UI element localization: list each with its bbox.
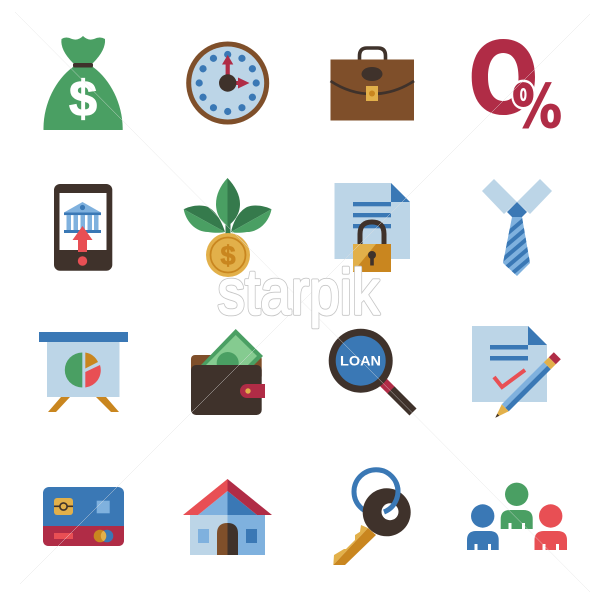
icon: credit card bbox=[43, 487, 124, 546]
icon: zero percent: % bbox=[512, 72, 562, 142]
icon: money bag: $ bbox=[69, 71, 97, 127]
icon: loan magnifier: LOAN bbox=[340, 354, 381, 368]
icon: money bag bbox=[43, 36, 123, 130]
icon: key bbox=[333, 470, 411, 565]
icon: locked document bbox=[334, 183, 410, 272]
icon: mobile banking bbox=[54, 184, 112, 271]
icon: house bbox=[183, 479, 272, 555]
icon: clock bbox=[186, 42, 269, 124]
icon: plant with coin: $ bbox=[220, 240, 236, 270]
icon: wallet with cash bbox=[191, 329, 265, 415]
icon: necktie bbox=[482, 179, 552, 276]
icon: briefcase bbox=[330, 48, 414, 120]
icon: plant with coin bbox=[184, 178, 272, 277]
watermark: starpik: starpik bbox=[218, 256, 380, 328]
icon: document with pencil bbox=[472, 326, 561, 418]
icon: zero percent bbox=[472, 39, 562, 142]
icon: zero percent: % bbox=[512, 72, 562, 142]
icon: team of people bbox=[467, 483, 567, 550]
watermark: starpik: starpik bbox=[218, 256, 380, 328]
icon: loan magnifier bbox=[329, 329, 413, 412]
icon: presentation board bbox=[39, 332, 128, 412]
